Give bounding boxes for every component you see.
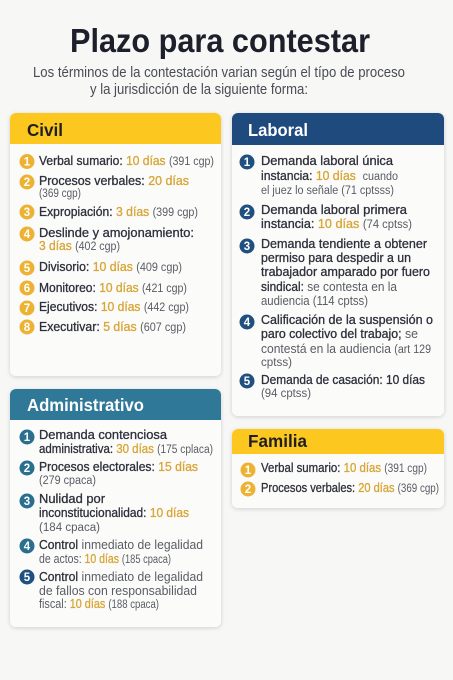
item 2: Procesos verbales: 20 días (369 cgp) (261, 480, 439, 495)
item 4: contestá en la audiencia (art 129 (261, 341, 431, 356)
header: Administrativo: Administrativo (27, 395, 144, 415)
item 5: 5 (244, 376, 251, 388)
item 5: Control inmediato de legalidad (39, 569, 203, 584)
item 2 (240, 202, 412, 231)
item 1 (20, 427, 213, 456)
item 1: el juez lo señale (71 cptsss) (261, 185, 394, 197)
item 3 (20, 491, 189, 534)
item 8: Executivar: 5 días (607 cgp) (39, 319, 186, 334)
header: Laboral: Laboral (248, 120, 308, 140)
subtitle: Los términos de la contestación varian según el típo de proceso (33, 65, 405, 81)
item 2: Procesos verbales: 20 días (39, 173, 189, 188)
panel: Familia (232, 429, 444, 508)
item 2: 2 (245, 484, 251, 496)
item 4 (240, 312, 433, 369)
item 2: 2 (24, 177, 30, 189)
panel: Administrativo (10, 389, 221, 627)
item 4: cptss) (261, 357, 292, 369)
header: Familia (232, 429, 444, 454)
item 1: 1 (24, 156, 31, 168)
item 5: (94 cptss) (261, 388, 311, 400)
item 1: Demanda contenciosa (39, 427, 168, 442)
header: Laboral (232, 113, 444, 145)
item 3 (240, 236, 430, 308)
item 5: Divisorio: 10 días (409 cgp) (39, 259, 182, 274)
item 2: (279 cpaca) (39, 475, 96, 487)
item 4: 3 días (402 cgp) (39, 238, 120, 253)
item 2: (369 cgp) (39, 188, 81, 200)
item 2: 2 (24, 463, 30, 475)
item 4: 4 (24, 229, 31, 241)
item 4 (20, 225, 194, 253)
panel: Laboral (232, 113, 444, 416)
item 3: permiso para despedir a un (261, 250, 411, 265)
item 7: 7 (24, 303, 30, 315)
item 1: Verbal sumario: 10 días (391 cgp) (39, 153, 214, 168)
header: Administrativo (10, 389, 221, 420)
item 1: administrativa: 30 días (175 cplaca) (39, 441, 213, 456)
subtitle: y la jurisdicción de la siguiente forma: (90, 82, 308, 98)
item 3: (184 cpaca) (39, 522, 100, 534)
item 4 (20, 537, 203, 566)
item 1: instancia: 10 días cuando (261, 168, 398, 183)
item 3: sindical: se contesta en la (261, 279, 398, 294)
item 2: Procesos electorales: 15 días (39, 459, 198, 474)
item 4: paro colectivo del trabajo; se (261, 326, 418, 341)
item 1: 1 (244, 157, 251, 169)
panel: Civil (10, 113, 221, 376)
item 3: Demanda tendiente a obtener (261, 236, 428, 251)
item 4: Control inmediato de legalidad (39, 537, 203, 552)
item 2: instancia: 10 días (74 cptss) (261, 216, 412, 231)
item 2: Demanda laboral primera (261, 202, 408, 217)
item 3: 3 (24, 496, 30, 508)
item 1 (240, 153, 398, 197)
item 2 (20, 173, 189, 200)
item 1: 1 (245, 465, 252, 477)
item 5: 5 (24, 263, 31, 275)
item 6: Monitoreo: 10 días (421 cgp) (39, 280, 187, 295)
item 4: 4 (244, 317, 251, 329)
item 5: fiscal: 10 días (188 cpaca) (39, 596, 159, 611)
item 7: Ejecutivos: 10 días (442 cgp) (39, 299, 189, 314)
item 3: audiencia (114 cptss) (261, 293, 368, 308)
item 4: Deslinde y amojonamiento: (39, 225, 194, 240)
item 2: 2 (244, 207, 250, 219)
item 5 (240, 372, 425, 400)
item 1: Verbal sumario: 10 días (391 cgp) (261, 460, 427, 475)
item 3: 3 (244, 241, 250, 253)
header: Familia: Familia (248, 431, 307, 451)
item 3: Nulidad por (39, 491, 106, 506)
item 3: inconstitucionalidad: 10 días (39, 505, 189, 520)
subtitle (33, 65, 405, 98)
title: Plazo para contestar (70, 22, 370, 59)
item 2 (20, 459, 198, 487)
item 3: trabajador amparado por fuero (261, 264, 430, 279)
item 1: 1 (24, 432, 31, 444)
header: Civil (10, 113, 221, 144)
item 4: 4 (24, 541, 31, 553)
item 4: de actos: 10 días (185 cpaca) (39, 551, 171, 566)
item 5: 5 (24, 572, 31, 584)
item 4: Calificación de la suspensión o (261, 312, 433, 327)
item 3: Expropiación: 3 días (399 cgp) (39, 204, 198, 219)
header: Civil: Civil (27, 120, 63, 140)
item 5: Demanda de casación: 10 días (261, 372, 425, 387)
item 6: 6 (24, 283, 30, 295)
item 5 (20, 569, 203, 611)
item 3: 3 (24, 207, 30, 219)
item 8: 8 (24, 322, 31, 334)
item 1: Demanda laboral única (261, 153, 394, 168)
item 5: de fallos con responsabilidad (39, 583, 197, 598)
